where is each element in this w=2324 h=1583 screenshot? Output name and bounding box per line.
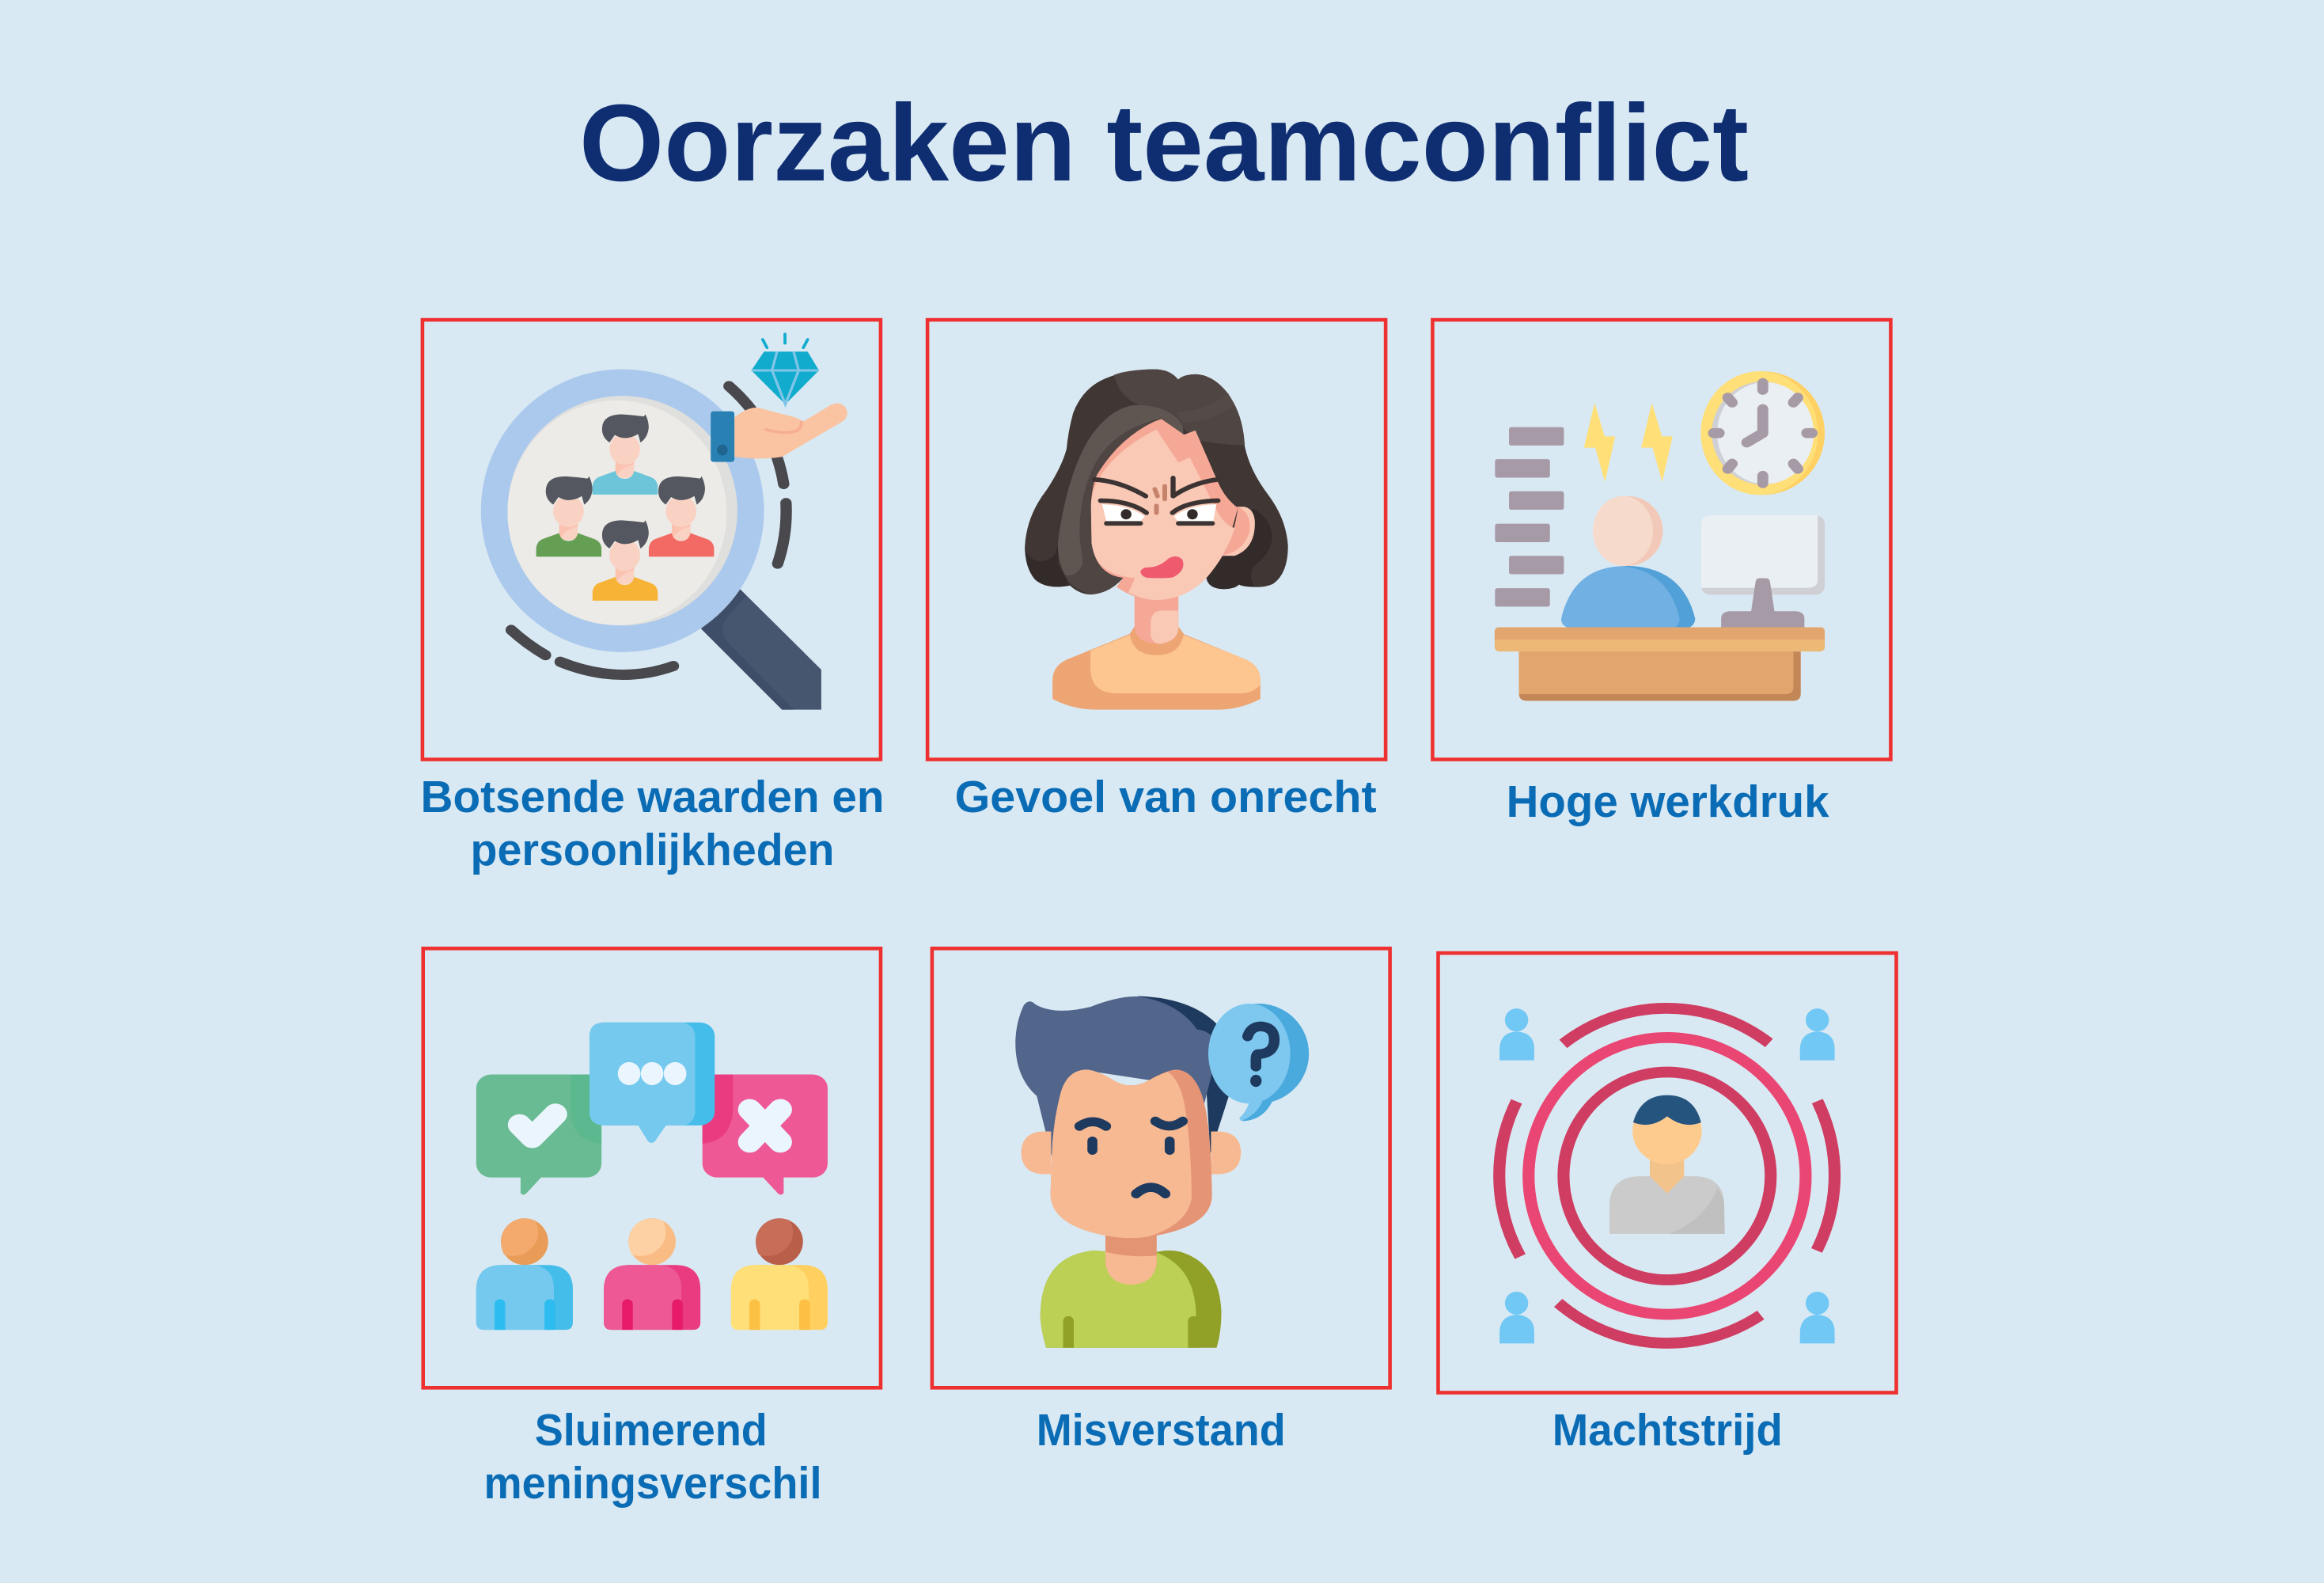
icon part: concentric rings	[1499, 1008, 1835, 1343]
frame: misverstand	[932, 948, 1390, 1387]
icon part: neck	[1105, 1232, 1157, 1285]
panel: misverstand	[932, 948, 1390, 1456]
icon part: lightning bolts	[1584, 403, 1673, 482]
label: machtstrijd: Machtstrijd	[1552, 1405, 1783, 1456]
frame: sluimerend meningsverschil	[423, 948, 881, 1387]
panel: sluimerend meningsverschil	[423, 948, 881, 1509]
icon part: head	[1593, 496, 1662, 566]
icon: angry woman	[1025, 369, 1288, 710]
frame: botsende waarden	[423, 320, 881, 760]
icon part: pink bubble with cross	[703, 1075, 828, 1194]
panel: machtstrijd	[1439, 953, 1896, 1456]
label: sluimerend meningsverschil: meningsverschil	[484, 1458, 821, 1509]
icon part: person yellow	[731, 1218, 828, 1330]
icon part: person right	[649, 476, 714, 556]
label: botsende waarden: Botsende waarden en	[421, 772, 885, 822]
icon part: clock	[1700, 371, 1825, 495]
icon part: stack of bars	[1495, 427, 1564, 606]
icon part: four small people	[1499, 1008, 1835, 1343]
icon part: face	[1091, 419, 1238, 600]
icon part: person bottom	[593, 520, 658, 601]
panel: hoge werkdruk	[1432, 320, 1890, 827]
icon part: neck	[1135, 596, 1178, 644]
label: misverstand: Misverstand	[1037, 1405, 1286, 1456]
frame: gevoel van onrecht	[927, 320, 1386, 760]
icon part: magnifier handle	[701, 590, 821, 710]
icon part: person top	[593, 414, 658, 495]
label: hoge werkdruk: Hoge werkdruk	[1507, 776, 1829, 827]
icon part: lens	[481, 369, 764, 652]
panel: gevoel van onrecht	[927, 320, 1386, 822]
label: sluimerend meningsverschil	[484, 1405, 821, 1509]
icon: speech bubbles and three people	[476, 1023, 828, 1330]
icon part: blue bubble with dots	[590, 1023, 715, 1143]
icon part: diamond	[752, 334, 819, 404]
label: gevoel van onrecht: Gevoel van onrecht	[955, 772, 1377, 822]
icon part: monitor	[1701, 515, 1825, 628]
icon part: person blue	[476, 1218, 573, 1330]
label: sluimerend meningsverschil: Sluimerend	[535, 1405, 768, 1456]
icon part: frown lines	[1154, 486, 1165, 513]
icon part: torso	[1561, 566, 1695, 628]
icon part: desk	[1495, 627, 1825, 700]
icon part: torso	[1041, 1251, 1221, 1348]
icon: person inside concentric rings	[1499, 1008, 1835, 1343]
icon: person at desk under pressure	[1495, 371, 1825, 700]
icon part: hand	[711, 404, 847, 462]
icon part: torso	[1052, 626, 1261, 710]
title: Oorzaken teamconflict	[579, 82, 1749, 204]
panel: botsende waarden	[421, 320, 885, 875]
frame: hoge werkdruk	[1432, 320, 1890, 760]
icon part: dashed arcs	[511, 386, 787, 675]
label: botsende waarden	[421, 772, 885, 875]
icon part: front hair lock	[1058, 405, 1183, 594]
icon part: face	[1051, 1069, 1212, 1238]
icon: confused man with question bubble	[1015, 996, 1309, 1348]
frame: machtstrijd	[1439, 953, 1896, 1393]
icon part: green bubble with check	[476, 1075, 601, 1194]
icon part: person pink	[604, 1218, 700, 1330]
icon part: person left	[536, 476, 601, 556]
icon part: eyes	[1094, 478, 1218, 523]
icon part: ears	[1021, 1131, 1241, 1174]
icon part: hair	[1025, 369, 1288, 594]
icon part: hair back	[1138, 996, 1230, 1153]
icon part: facial features	[1079, 1121, 1183, 1194]
icon: magnifier with people and diamond	[481, 334, 847, 710]
icon part: ear	[1223, 507, 1255, 556]
icon part: question bubble	[1208, 1004, 1309, 1121]
icon part: central person	[1609, 1095, 1725, 1234]
icon part: mouth	[1140, 556, 1183, 578]
icon part: hair	[1015, 996, 1213, 1156]
label: botsende waarden: persoonlijkheden	[470, 825, 834, 875]
